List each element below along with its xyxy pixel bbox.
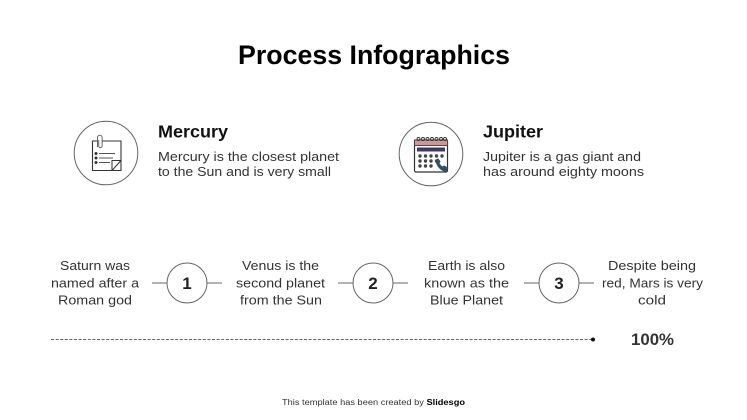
text: Jupiter description: has around eighty moons [483,164,645,179]
step 3: 3 [554,274,564,293]
text: Saturn: named after a [51,276,140,290]
text: Jupiter description [483,149,645,179]
progress line [51,338,595,342]
icon: clipboard note [74,121,138,185]
text: Mercury description [158,149,339,179]
text: Venus: second planet [236,276,325,290]
title: Process Infographics [238,40,510,70]
heading: Jupiter: Jupiter [483,122,543,142]
step 2 [338,263,408,303]
text: Mars: cold [638,292,666,308]
panel: Mercury [74,121,339,185]
text: Mercury description: to the Sun and is very small [158,164,331,179]
text: Earth [424,258,509,308]
text: Mars: red, Mars is very [602,276,704,290]
text: Jupiter description: Jupiter is a gas giant and [483,149,641,164]
progress value: 100% [631,330,674,349]
text: Mars: Despite being [608,258,696,273]
text: Earth: Blue Planet [430,292,503,308]
text: Saturn: Roman god [58,292,132,308]
step 1: 1 [182,274,192,293]
text: Earth: Earth is also [428,258,505,273]
text: Venus [236,258,325,308]
step 3 [524,263,594,303]
text: Mercury description: Mercury is the closest planet [158,149,339,164]
icon: calendar with phone [399,122,463,186]
step 1 [152,263,222,303]
text: Saturn: Saturn was [60,258,131,273]
text: Venus: Venus is the [242,258,319,273]
text: Earth: known as the [424,276,509,290]
panel: Jupiter [399,122,645,186]
step 2: 2 [368,274,378,293]
text: Saturn [51,258,140,308]
footer credit: This template has been created by Slidesgo [282,398,465,407]
text: Venus: from the Sun [240,292,322,308]
heading: Mercury: Mercury [158,122,228,142]
text: Mars [602,258,704,308]
